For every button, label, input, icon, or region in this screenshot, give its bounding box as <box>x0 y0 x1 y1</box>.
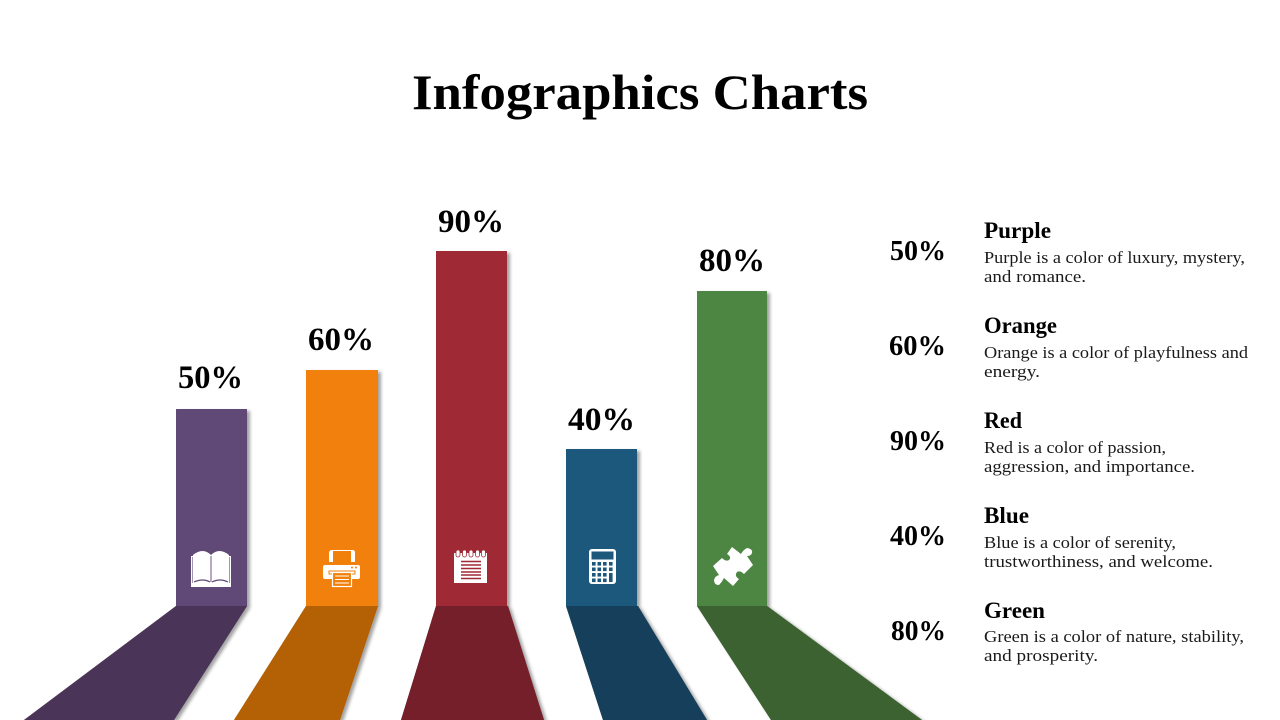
icon: puzzle piece <box>713 547 753 586</box>
legend: purple: Purple <box>984 218 1051 243</box>
orange bar group <box>234 322 378 720</box>
legend: purple: and romance. <box>984 267 1086 286</box>
legend: orange: 60% <box>889 331 946 362</box>
legend: purple: Purple is a color of luxury, mystery, <box>984 248 1245 267</box>
purple bar group <box>24 360 247 720</box>
legend: green: Green is a color of nature, stability, <box>984 627 1244 646</box>
legend <box>889 218 1249 665</box>
purple bar group: 50% <box>178 360 243 396</box>
legend: orange: Orange <box>984 313 1057 338</box>
legend: green: and prosperity. <box>984 646 1098 665</box>
legend: blue: Blue <box>984 503 1029 528</box>
legend: purple <box>890 218 1245 286</box>
blue bar group: 40% <box>568 402 635 438</box>
bar chart <box>24 204 922 720</box>
orange bar group: 60% <box>308 322 374 358</box>
legend: red: aggression, and importance. <box>984 457 1195 476</box>
legend: orange <box>889 313 1249 381</box>
legend: red: Red <box>984 408 1022 433</box>
legend: blue: 40% <box>890 521 946 552</box>
icon: book <box>191 551 231 587</box>
legend: green <box>891 598 1244 665</box>
legend: blue <box>890 503 1213 571</box>
legend: blue: trustworthiness, and welcome. <box>984 552 1213 571</box>
legend: red: Red is a color of passion, <box>984 438 1166 457</box>
legend: red: 90% <box>890 426 946 457</box>
title: Infographics Charts <box>412 64 868 120</box>
blue bar group <box>566 402 707 720</box>
legend: purple: 50% <box>890 236 946 267</box>
green bar group <box>697 243 922 720</box>
icon: notepad <box>454 550 487 583</box>
legend: red <box>890 408 1195 476</box>
red bar group: 90% <box>438 204 504 240</box>
icon: calculator <box>589 549 616 584</box>
legend: orange: energy. <box>984 362 1040 381</box>
legend: green: Green <box>984 598 1045 623</box>
icon: printer <box>323 550 360 586</box>
red bar group <box>401 204 544 720</box>
legend: orange: Orange is a color of playfulness and <box>984 343 1249 362</box>
legend: green: 80% <box>891 616 946 647</box>
legend: blue: Blue is a color of serenity, <box>984 533 1176 552</box>
green bar group: 80% <box>699 243 765 279</box>
